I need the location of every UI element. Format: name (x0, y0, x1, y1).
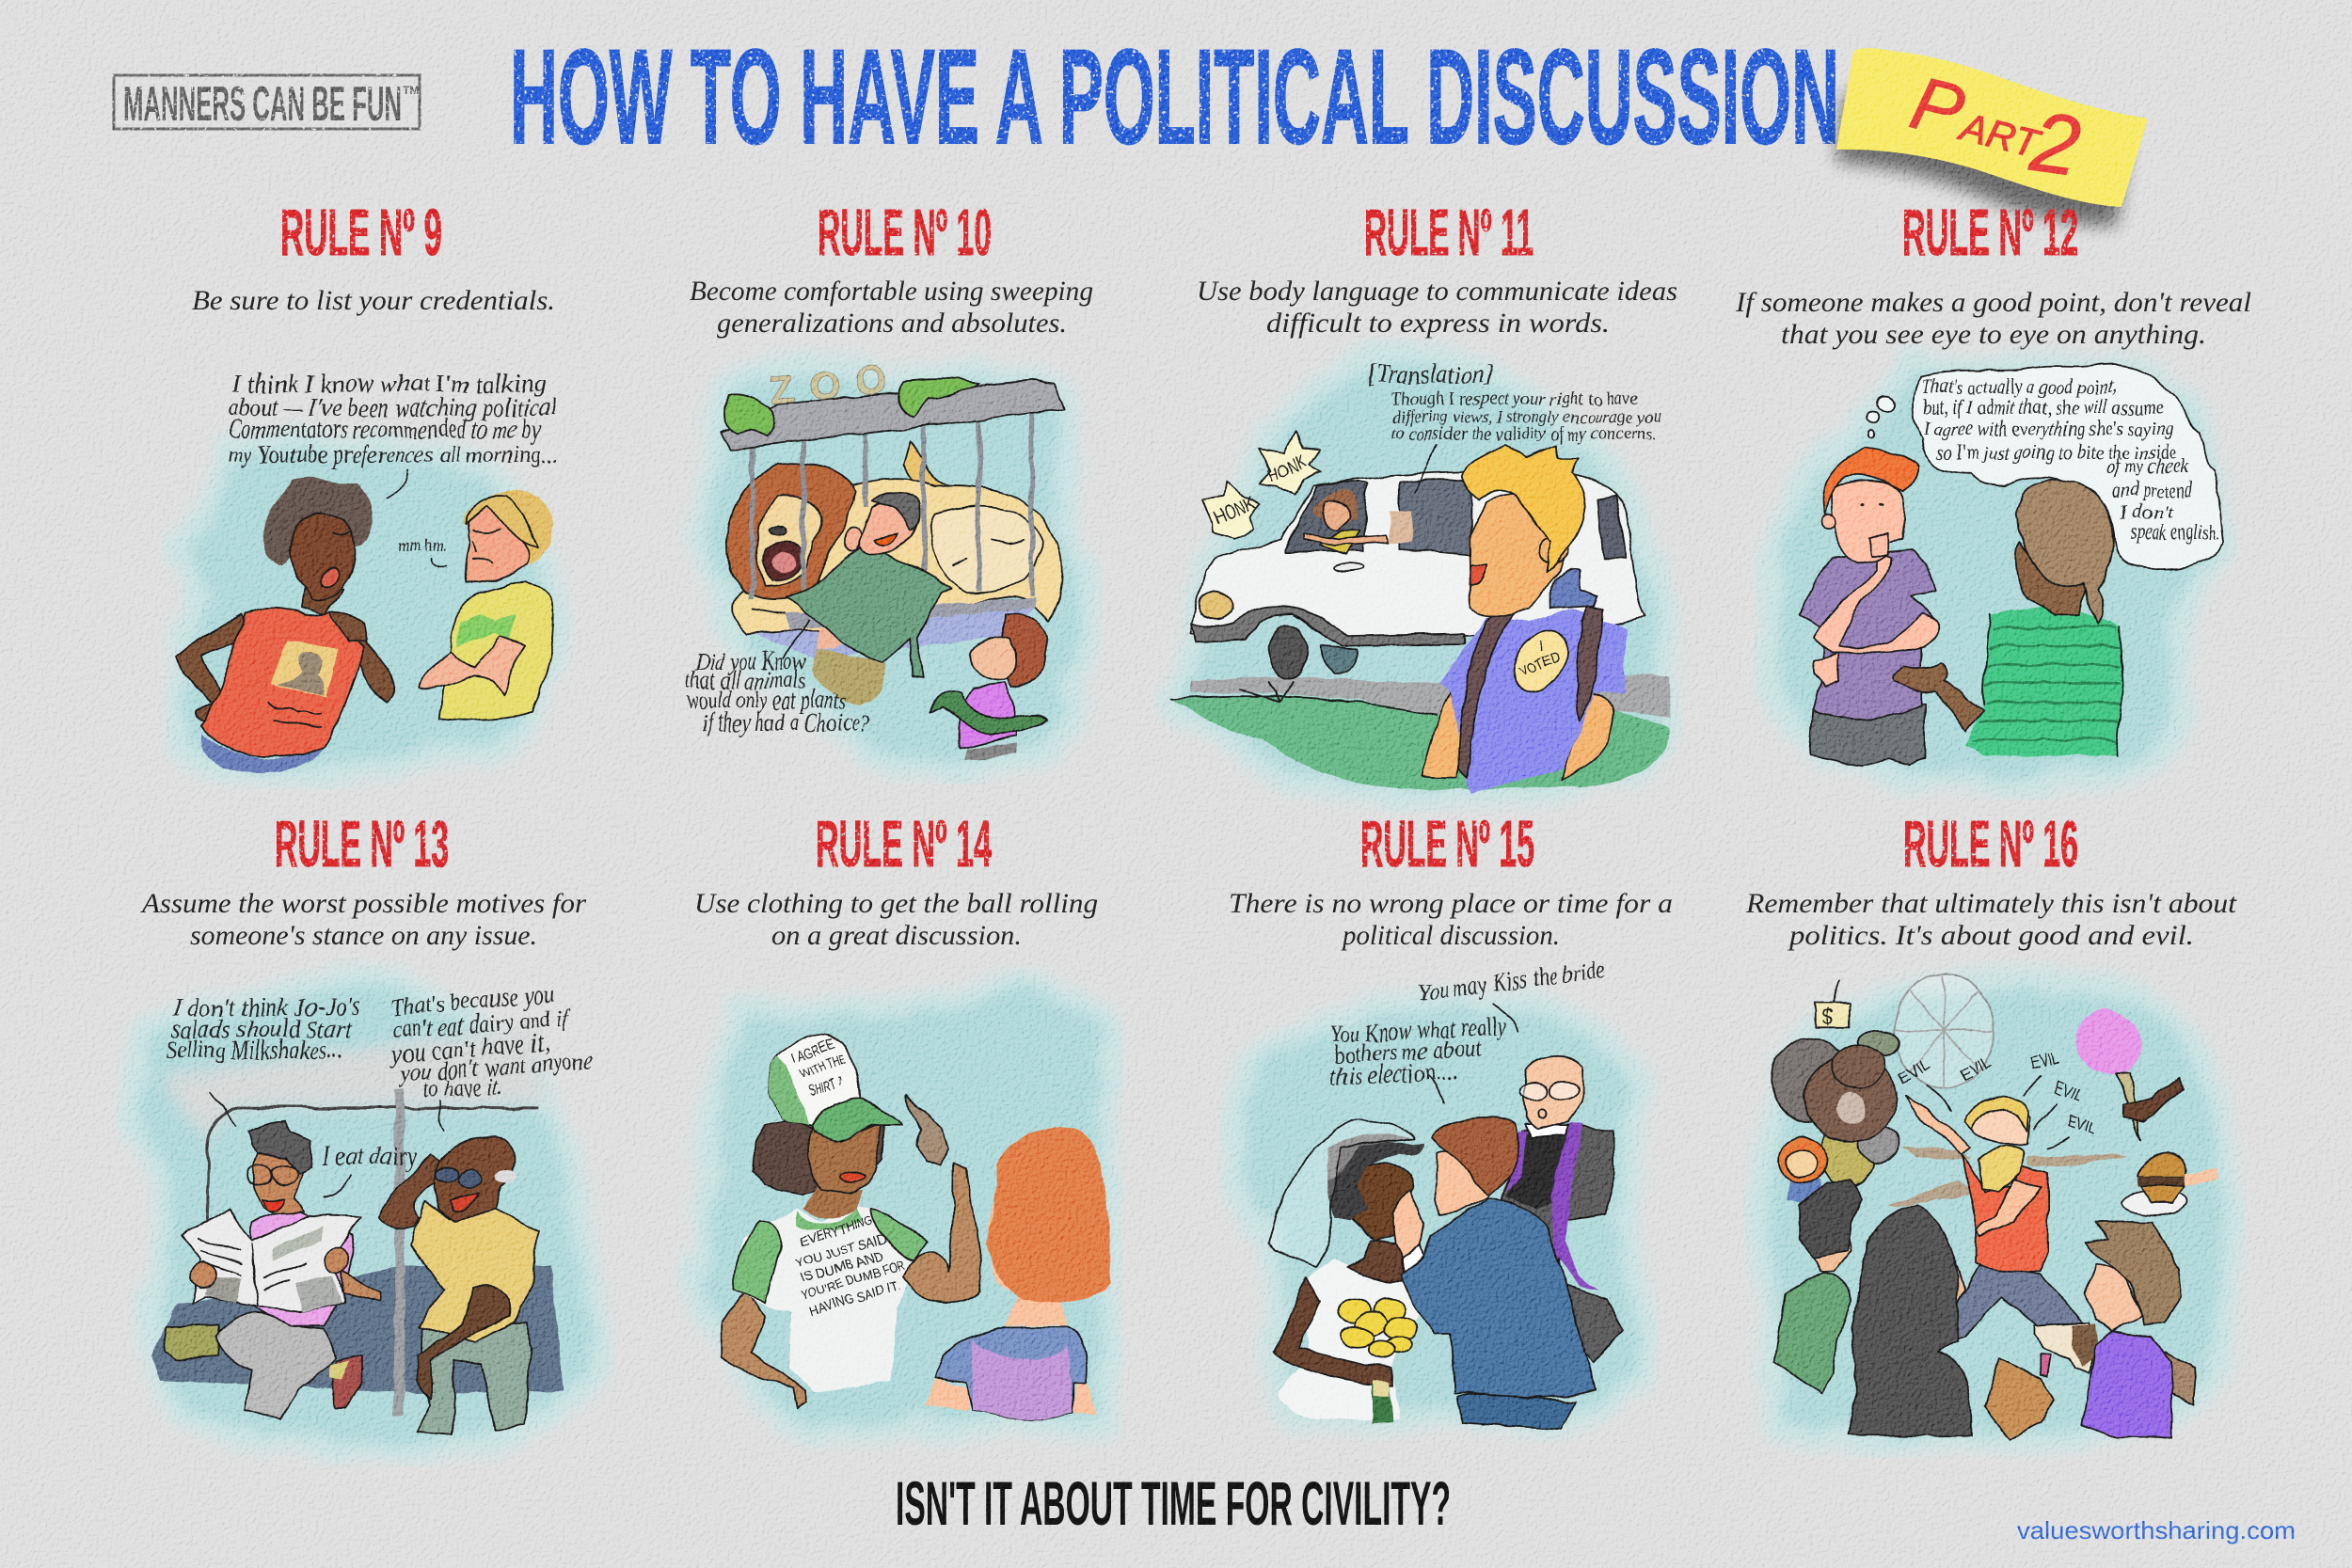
sticky note: Part 2: 2 (2025, 95, 2086, 195)
speech: rule 12 thought text: of my cheek (2106, 454, 2189, 478)
text on cap (789, 1036, 848, 1100)
labels: EVIL: EVIL (2028, 1049, 2060, 1073)
text: RULE Nº 13 (275, 807, 449, 880)
panel: rule 12 illustration (1767, 357, 2224, 787)
speech: rule 13 dialogue: That's because you (390, 979, 556, 1022)
text: RULE Nº 9 (280, 196, 442, 269)
figure: woman reading newspaper (183, 1121, 381, 1419)
sign: carnival price: $ (1821, 1006, 1833, 1029)
illustration: carnival prize plush toys (1772, 1030, 1899, 1206)
figure: child holding toy dinosaur (929, 613, 1048, 760)
illustration: ferris wheel (1895, 973, 1994, 1088)
icon: honk bursts: HONK (1211, 493, 1260, 530)
panel: rule 13 illustration (130, 973, 601, 1452)
speech: rule 13 dialogue: Selling Milkshakes... (167, 1036, 342, 1064)
labels: EVIL (1896, 1049, 2099, 1138)
text: RULE Nº 16 (1903, 807, 2078, 880)
text: rule 14 description: Use clothing to get the ball rolling (694, 888, 1098, 919)
text: rule 15 description (1229, 888, 1673, 951)
figure: blond voter with backpack (1422, 444, 1627, 793)
text: rule 12 description: that you see eye to eye on anything. (1781, 319, 2206, 350)
speech: rule 12 thought text: I agree with everything she's saying (1923, 417, 2173, 440)
text: rule 16 description: Remember that ultimately this isn't about (1745, 888, 2237, 919)
labels: EVIL: EVIL (1957, 1053, 1994, 1085)
footer tagline: ISN'T IT ABOUT TIME FOR CIVILITY? (896, 1468, 1451, 1538)
text: rule 12 description (1735, 287, 2251, 350)
thought bubble (1867, 365, 2224, 569)
panel: rule 10 illustration (686, 356, 1090, 771)
text: rule 11 description: Use body language to communicate ideas (1197, 276, 1677, 307)
text: RULE Nº 10 (818, 196, 992, 269)
labels: EVIL: EVIL (1896, 1054, 1932, 1087)
speech: rule 9 dialogue: I think I know what I'm talking (231, 370, 546, 398)
sign: ZOO: ZOO (768, 356, 888, 413)
text: rule 14 description: on a great discussion. (771, 920, 1022, 951)
speech: rule 15 dialogue: You may Kiss the bride (1417, 956, 1607, 1006)
text: rule 12 description: If someone makes a good point, don't reveal (1735, 287, 2251, 318)
text: rule 13 description: Assume the worst possible motives for (140, 888, 586, 919)
text: rule 14 description (694, 888, 1098, 951)
text on cap: WITH THE (799, 1051, 848, 1081)
figure: talking woman in red shirt (176, 470, 409, 773)
badge: I voted: VOTED (1518, 649, 1562, 681)
speech: rule 10 dialogue: would only eat plants (686, 686, 846, 714)
illustration: bus interior and seat (151, 1089, 564, 1417)
text on t-shirt: IS DUMB AND (799, 1248, 884, 1286)
speech: rule 15 dialogue: this election.... (1330, 1056, 1458, 1091)
speech: rule 13 dialogue: salads should Start (171, 1015, 353, 1043)
figure: person with orange hair from behind (926, 1126, 1110, 1421)
speech: rule 11 translation: to consider the validity of my concerns. (1391, 424, 1656, 444)
text: rule 10 description: Become comfortable using sweeping (690, 276, 1093, 307)
sticky note: Part 2 (1836, 48, 2148, 226)
logo: Manners Can Be Fun (114, 75, 420, 132)
panel: rule 16 illustration (1758, 973, 2233, 1444)
text on cap: I AGREE (789, 1036, 836, 1066)
speech: rule 11 translation: [Translation] (1367, 360, 1493, 388)
sign: carnival price (1815, 980, 1849, 1029)
speech: rule 13 dialogue: you can't have it, (389, 1028, 550, 1068)
figure: groom in blue suit (1392, 1005, 1596, 1429)
speech: rule 10 dialogue (686, 647, 869, 736)
icon: honk bursts (1201, 431, 1321, 539)
text: RULE Nº 15 (1360, 807, 1534, 880)
illustration: road and grass (1169, 674, 1670, 790)
speech: rule 15 dialogue: You Know what really (1330, 1011, 1506, 1049)
speech: rule 11 translation (1367, 360, 1661, 444)
figure: bearded man pointing with many arms (1889, 1076, 2127, 1341)
figure: woman in slogan t-shirt and cap (721, 1036, 981, 1410)
figure: man in green shirt waving (784, 493, 951, 705)
logo: Manners Can Be Fun: MANNERS CAN BE FUN (123, 77, 402, 132)
website credit: valuesworthsharing.com (2017, 1516, 2296, 1544)
speech: rule 13 dialogue: I eat dairy (322, 1142, 417, 1170)
figure: bald man with sunglasses (377, 1136, 538, 1435)
figure: listener in yellow shirt (419, 490, 554, 720)
labels: EVIL: EVIL (2066, 1111, 2099, 1138)
speech: rule 12 thought text: I don't (2119, 500, 2174, 524)
figures: carnival crowd and dog (1775, 1180, 2196, 1439)
figure: priest with purple stole (1502, 1055, 1624, 1361)
text: rule 16 description (1745, 888, 2237, 951)
speech: rule 9 dialogue (228, 370, 557, 554)
speech: rule 11 translation: Though I respect your right to have (1391, 389, 1639, 409)
text: rule 13 description: someone's stance on any issue. (190, 920, 537, 951)
speech: rule 9 dialogue: mm hm. (398, 536, 447, 554)
speech: rule 10 dialogue: that all animals (686, 666, 806, 694)
panel: rule 15 illustration (1232, 956, 1647, 1429)
text on cap: SHIRT ↗ (808, 1072, 847, 1100)
speech: rule 12 thought text: but, if I admit that, she will assume (1922, 395, 2163, 419)
sticky note: Part 2: PART (1903, 60, 2054, 174)
speech: rule 12 thought text: That's actually a good point, (1922, 374, 2116, 398)
text: RULE Nº 14 (816, 807, 992, 880)
labels: EVIL: EVIL (2052, 1077, 2085, 1105)
speech: rule 15 dialogue (1330, 956, 1607, 1091)
text on t-shirt: EVERYTHING (799, 1212, 875, 1249)
speech: rule 11 translation: differing views, I strongly encourage you (1391, 407, 1661, 427)
speech: rule 9 dialogue: my Youtube preferences all morning... (228, 440, 557, 468)
speech: rule 9 dialogue: about — I've been watching political (228, 393, 557, 421)
speech: rule 12 thought text: and pretend (2113, 478, 2193, 501)
speech: rule 13 dialogue: I don't think Jo-Jo's (172, 993, 361, 1022)
illustration: white van honking with driver (1191, 445, 1645, 679)
logo: Manners Can Be Fun: TM (403, 84, 419, 97)
illustration: cotton candy and burger (2074, 1008, 2217, 1214)
speech: rule 12 thought text: so I'm just going to bite the inside (1936, 440, 2177, 464)
text: rule 10 description (690, 276, 1093, 339)
text on t-shirt: HAVING SAID IT. (808, 1277, 901, 1319)
speech: rule 10 dialogue: if they had a Choice? (702, 708, 869, 736)
text on t-shirt: YOU'RE DUMB FOR (799, 1257, 908, 1303)
speech: rule 12 thought text (1922, 374, 2220, 544)
text: rule 11 description (1197, 276, 1677, 339)
speech: rule 10 dialogue: Did you Know (694, 647, 806, 675)
panel: rule 9 illustration (173, 370, 564, 778)
text: rule 10 description: generalizations and absolutes. (717, 308, 1067, 339)
figure: woman in green striped sweater (1892, 480, 2123, 755)
panel: rule 11 illustration (1169, 351, 1670, 800)
speech: rule 9 dialogue: Commentators recommended to me by (228, 415, 541, 443)
text: rule 13 description (140, 888, 586, 951)
illustration: lions in zoo cage (721, 379, 1066, 658)
figure: bride with veil and bouquet (1268, 1119, 1423, 1424)
speech: rule 15 dialogue: bothers me about (1333, 1034, 1483, 1069)
speech: rule 13 dialogue (167, 979, 594, 1170)
foliage on zoo roof (723, 379, 979, 436)
speech: rule 13 dialogue: you don't want anyone (397, 1046, 594, 1087)
text on t-shirt: YOU JUST SAID (794, 1231, 888, 1270)
speech: rule 13 dialogue: can't eat dairy and if (390, 1004, 571, 1044)
panel: rule 14 illustration (690, 978, 1110, 1439)
text: RULE Nº 11 (1364, 196, 1534, 269)
text: rule 11 description: difficult to express in words. (1266, 308, 1610, 339)
speech: rule 13 dialogue: to have it. (423, 1071, 503, 1103)
text: rule 9 description: Be sure to list your credentials. (192, 285, 555, 316)
text: rule 16 description: politics. It's about good and evil. (1788, 920, 2194, 951)
text: rule 15 description: There is no wrong place or time for a (1229, 888, 1673, 919)
text on t-shirt (794, 1212, 908, 1319)
icon: honk bursts: HONK (1264, 451, 1310, 486)
text: rule 15 description: political discussion. (1341, 920, 1560, 951)
text: RULE Nº 12 (1902, 196, 2078, 269)
figure: red-haired man biting cheek (1800, 449, 1941, 765)
speech: rule 12 thought text: speak english. (2131, 520, 2220, 544)
badge: I voted: I (1538, 639, 1542, 655)
